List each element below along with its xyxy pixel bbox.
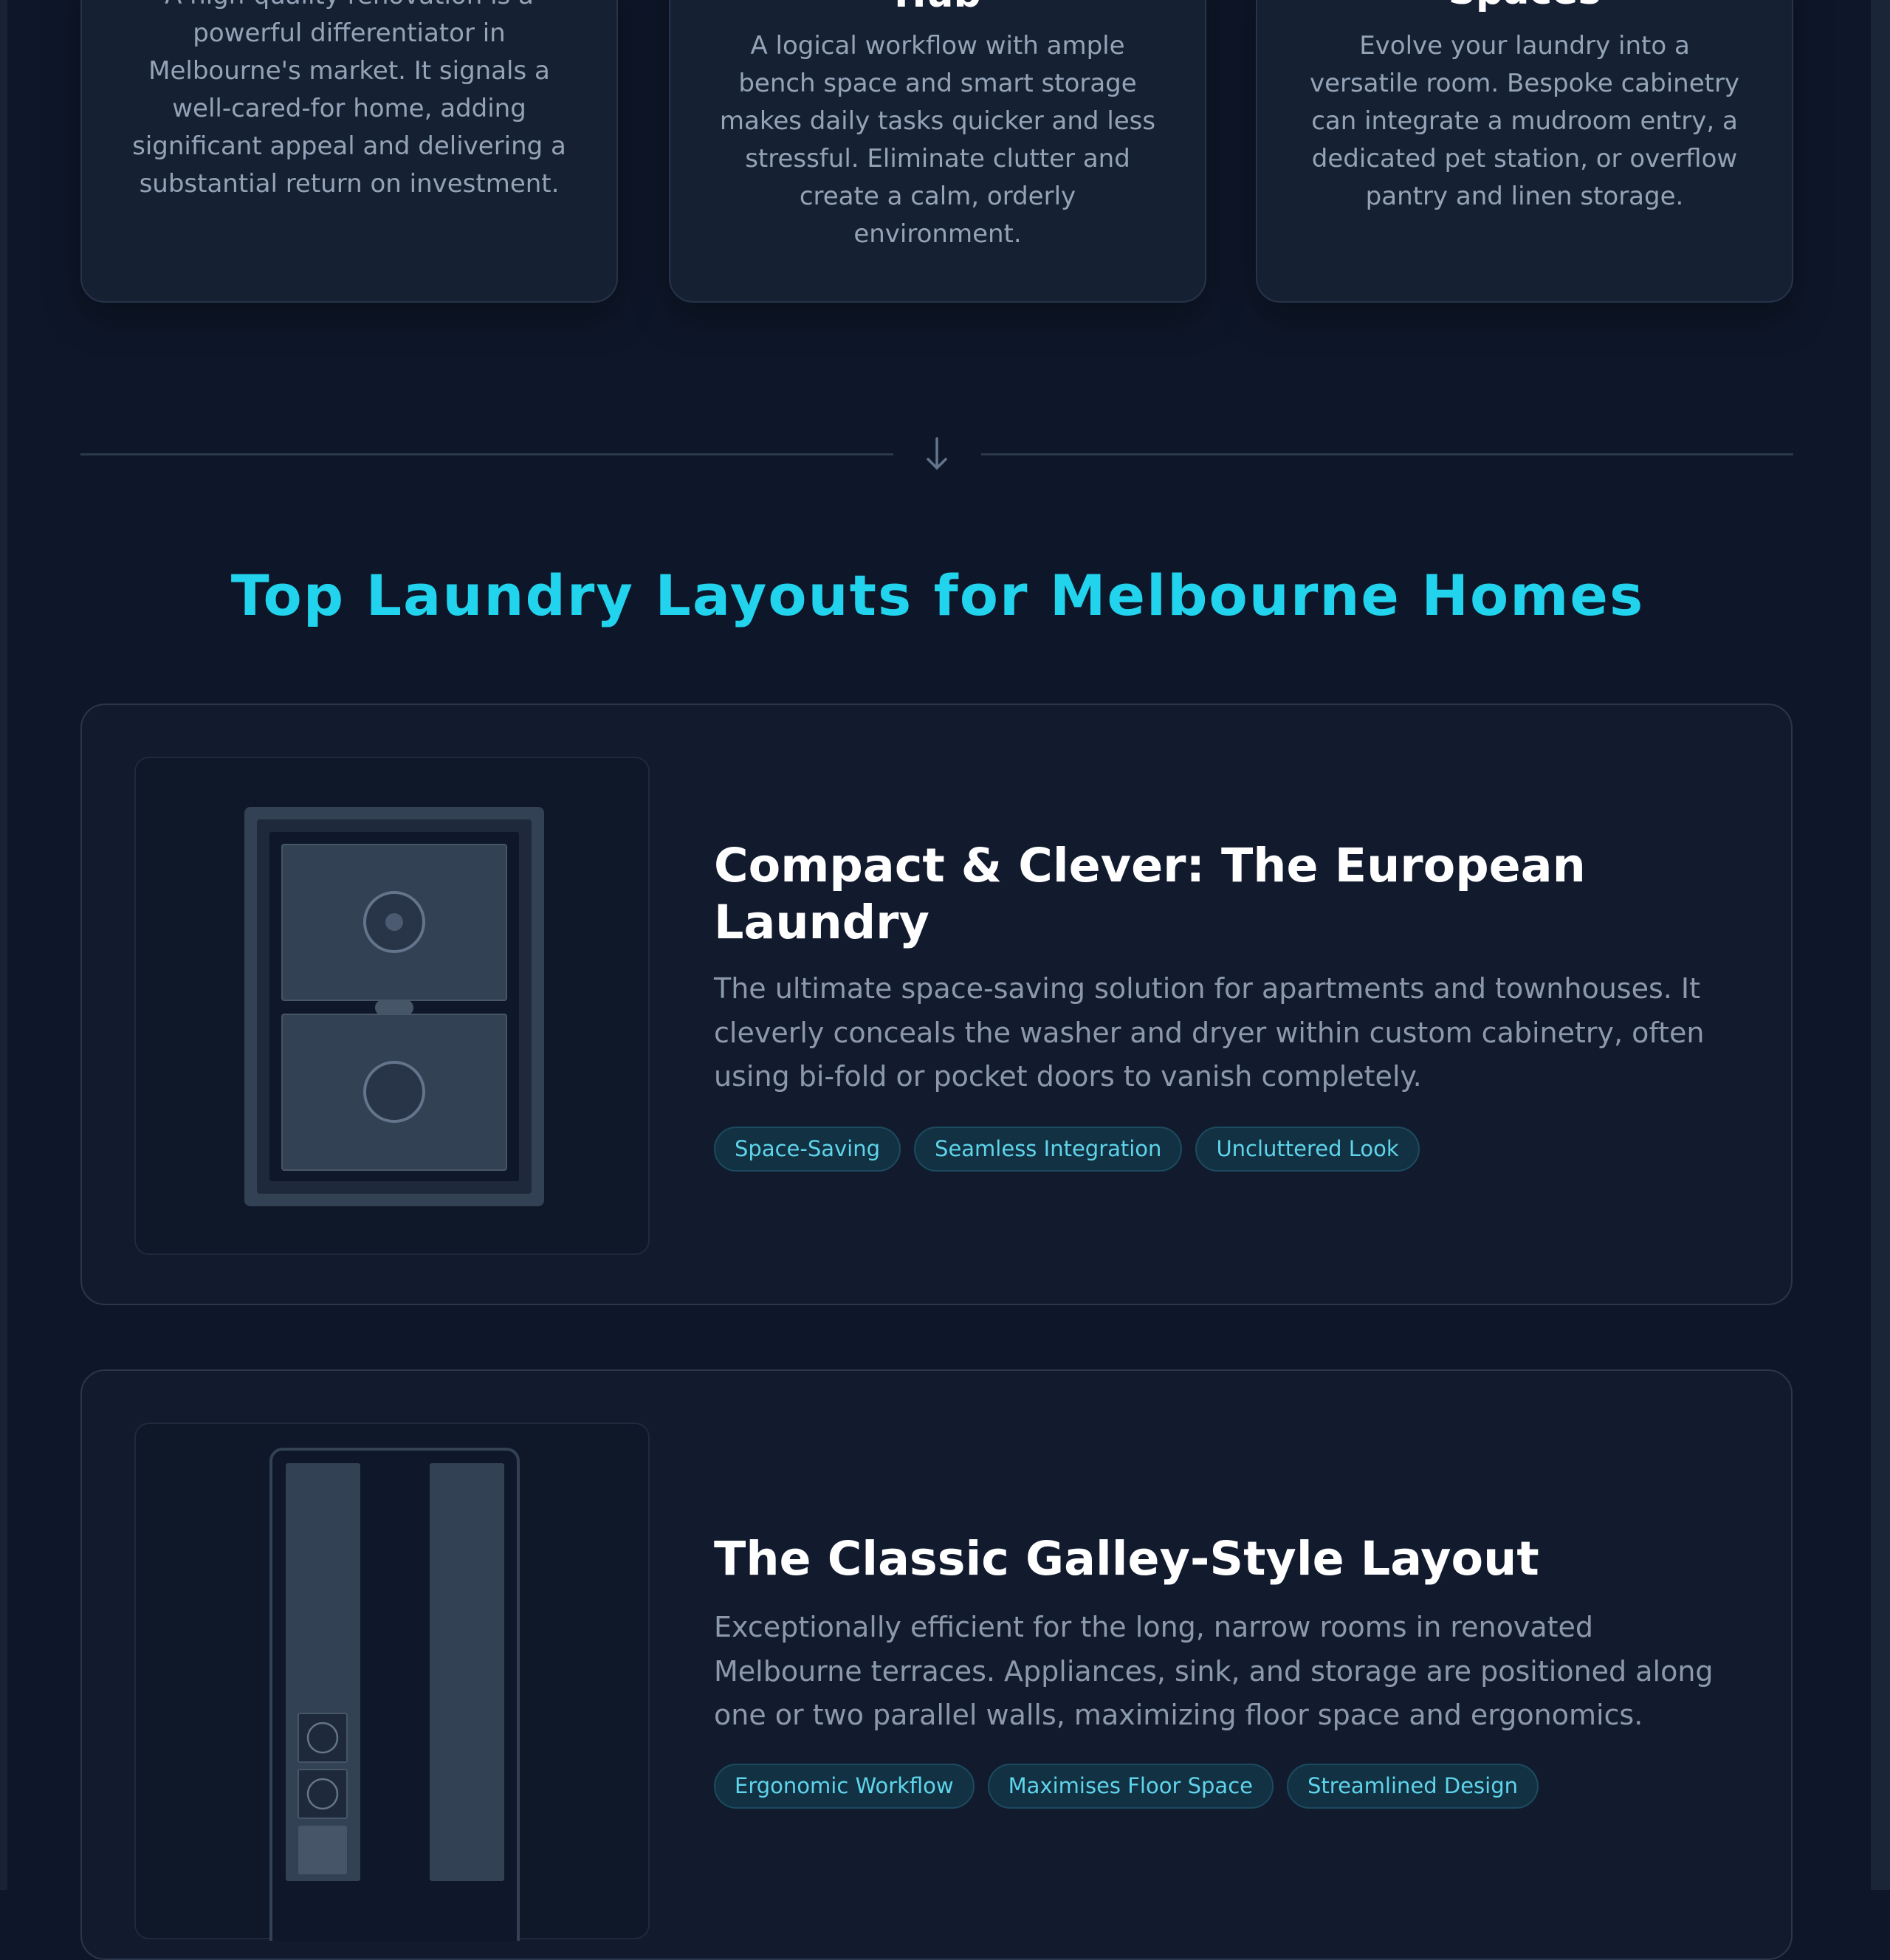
- card text: significant appeal and delivering a: [132, 131, 566, 161]
- card text: Melbourne's market. It signals a: [148, 56, 550, 86]
- panel: galley layout: [80, 1369, 1793, 1960]
- heading: Laundry: [714, 895, 929, 949]
- card: spaces: pantry and linen storage.: [1366, 182, 1683, 211]
- card: hub: [669, 0, 1206, 303]
- card: hub: environment.: [853, 219, 1022, 249]
- card: spaces: [1256, 0, 1793, 303]
- card: value: [80, 0, 618, 303]
- heading: The Classic Galley-Style Layout: [714, 1531, 1539, 1586]
- tags: Ergonomic Workflow: [735, 1773, 954, 1798]
- card text: [132, 0, 566, 199]
- edge strip right: [1871, 0, 1890, 1890]
- divider with arrow: [80, 437, 1793, 470]
- tags: [714, 1764, 1539, 1809]
- title: Top Laundry Layouts for Melbourne Homes: [231, 563, 1644, 628]
- card text: powerful differentiator in: [193, 18, 506, 48]
- card text: substantial return on investment.: [140, 169, 559, 199]
- icon: arrow down: [927, 437, 947, 470]
- card: hub: bench space and smart storage: [738, 69, 1137, 98]
- card: spaces: can integrate a mudroom entry, a: [1311, 106, 1738, 136]
- card: hub: create a calm, orderly: [800, 182, 1076, 211]
- tags: [714, 1127, 1420, 1172]
- panel: european laundry: [80, 704, 1793, 1305]
- description: Exceptionally efficient for the long, narrow rooms in renovated Melbourne terraces. Appliances, sink, and storage are positioned along one or two parallel walls, maximizing floor space and ergonomics.: [714, 1611, 1714, 1731]
- heading: Compact & Clever: The European: [714, 838, 1586, 893]
- heading: [714, 838, 1586, 949]
- tags: Space-Saving: [735, 1136, 880, 1161]
- card: hub: stressful. Eliminate clutter and: [745, 144, 1130, 173]
- card: hub: A logical workflow with ample: [750, 31, 1125, 61]
- tags: Uncluttered Look: [1216, 1136, 1399, 1161]
- tags: Streamlined Design: [1307, 1773, 1518, 1798]
- tags: Maximises Floor Space: [1008, 1773, 1253, 1798]
- illustration: european laundry: [134, 757, 650, 1255]
- illustration: galley: [134, 1423, 650, 1939]
- card text: well-cared-for home, adding: [172, 94, 526, 123]
- card: spaces: versatile room. Bespoke cabinetry: [1310, 69, 1739, 98]
- card: spaces: Evolve your laundry into a: [1359, 31, 1690, 61]
- edge strip left: [0, 0, 7, 1890]
- card: hub: makes daily tasks quicker and less: [720, 106, 1155, 136]
- tags: Seamless Integration: [935, 1136, 1161, 1161]
- description: The ultimate space-saving solution for apartments and townhouses. It cleverly conceals the washer and dryer within custom cabinetry, often using bi-fold or pocket doors to vanish completely.: [714, 972, 1704, 1093]
- card: spaces: dedicated pet station, or overflow: [1312, 144, 1737, 173]
